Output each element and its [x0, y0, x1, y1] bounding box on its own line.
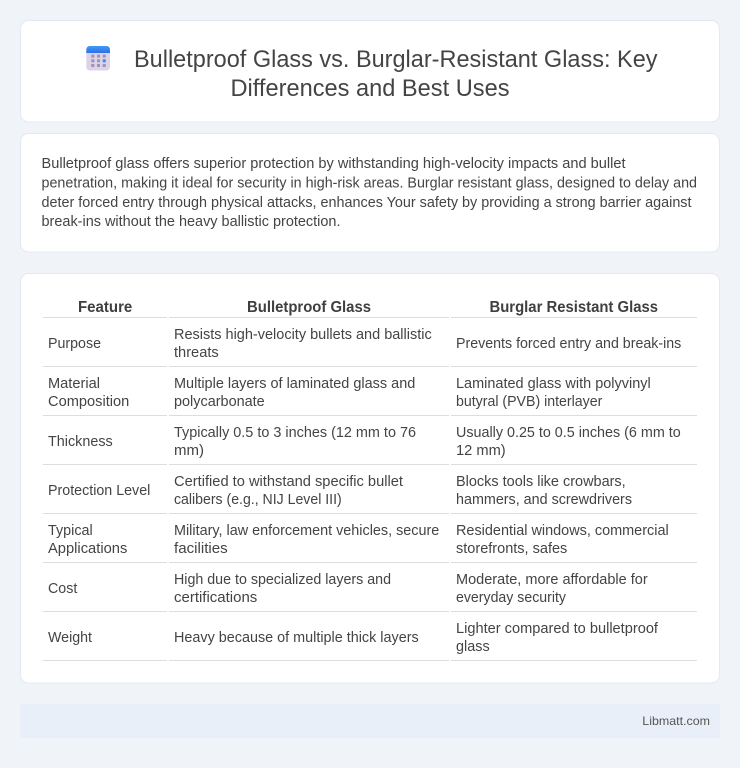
row: thickness: mm) [174, 443, 204, 459]
row: cost: everyday security [456, 590, 567, 606]
row: thickness: Usually 0.25 to 0.5 inches (6 mm to [456, 425, 681, 441]
row: protection level: Blocks tools like crowbars, [456, 474, 626, 490]
row: cost: Cost [48, 581, 77, 597]
row: typical applications [43, 523, 697, 563]
title: Bulletproof Glass vs. Burglar-Resistant Glass: Key [134, 46, 658, 73]
table header: Burglar Resistant Glass [490, 299, 658, 316]
row: material composition: Multiple layers of laminated glass and [174, 376, 415, 392]
row: thickness: 12 mm) [456, 443, 506, 459]
row: purpose [43, 327, 697, 367]
row: typical applications: Residential windows, commercial [456, 523, 669, 539]
row: weight [43, 621, 697, 661]
row: cost: Moderate, more affordable for [456, 572, 648, 588]
footer [20, 704, 720, 738]
row: material composition: Composition [48, 394, 129, 410]
panel: comparison table [20, 274, 720, 683]
row: typical applications: storefronts, safes [456, 541, 567, 557]
row: cost: certifications [174, 590, 257, 606]
intro text: Bulletproof glass offers superior protection by withstanding high-velocity impacts and bullet [42, 156, 626, 172]
footer: Libmatt.com [642, 714, 710, 728]
row: weight: glass [456, 639, 490, 655]
icon: calendar [86, 46, 110, 70]
row: weight: Lighter compared to bulletproof [456, 621, 658, 637]
row: purpose: Purpose [48, 336, 101, 352]
row: cost [43, 572, 697, 612]
table header: Bulletproof Glass [247, 299, 371, 316]
panel: header [20, 20, 720, 122]
row: protection level: Certified to withstand specific bullet [174, 474, 403, 490]
row: thickness: Typically 0.5 to 3 inches (12 mm to 76 [174, 425, 416, 441]
row: material composition: Material [48, 376, 100, 392]
row: typical applications: Applications [48, 541, 127, 557]
table header [43, 299, 697, 318]
row: protection level: Protection Level [48, 483, 150, 499]
row: purpose: threats [174, 345, 219, 361]
intro text: penetration, making it ideal for security in high-risk areas. Burglar resistant glass, designed to delay and [42, 176, 697, 192]
intro text [42, 156, 697, 230]
row: weight: Weight [48, 630, 92, 646]
row: protection level [43, 474, 697, 514]
title [134, 46, 658, 102]
intro text: break-ins without the heavy ballistic protection. [42, 214, 340, 230]
row: material composition: butyral (PVB) interlayer [456, 394, 603, 410]
table header: Feature [78, 299, 132, 316]
row: purpose: Resists high-velocity bullets and ballistic [174, 327, 432, 343]
row: cost: High due to specialized layers and [174, 572, 391, 588]
row: material composition: Laminated glass with polyvinyl [456, 376, 651, 392]
row: typical applications: Military, law enforcement vehicles, secure [174, 523, 439, 539]
row: material composition [43, 376, 697, 416]
row: typical applications: facilities [174, 541, 228, 557]
row: weight: Heavy because of multiple thick layers [174, 630, 419, 646]
row: material composition: polycarbonate [174, 394, 265, 410]
row: thickness: Thickness [48, 434, 113, 450]
row: protection level: calibers (e.g., NIJ Level III) [174, 492, 342, 508]
row: purpose: Prevents forced entry and break-ins [456, 336, 681, 352]
panel: intro [20, 134, 720, 252]
row: thickness [43, 425, 697, 465]
row: protection level: hammers, and screwdrivers [456, 492, 632, 508]
intro text: deter forced entry through physical attacks, enhances Your safety by providing a strong barrier against [42, 195, 692, 211]
title: Differences and Best Uses [230, 75, 510, 102]
row: typical applications: Typical [48, 523, 93, 539]
